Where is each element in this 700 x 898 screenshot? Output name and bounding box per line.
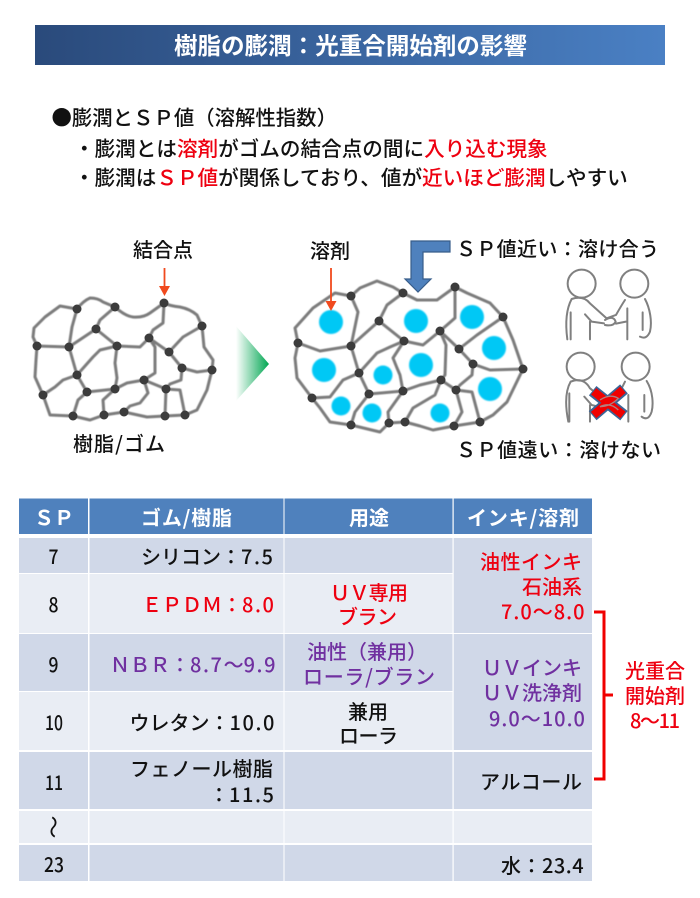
table header (19, 498, 592, 534)
label: close SP value: ＳＰ値近い：溶け合う (456, 233, 659, 262)
ink/solvent column values: 油性インキ (480, 546, 582, 575)
table (19, 498, 592, 881)
SP column values: 10 (45, 707, 63, 736)
rubber/resin column values: フェノール樹脂 (130, 753, 273, 782)
rubber/resin column values (110, 541, 277, 808)
label: solvent: 溶剤 (310, 235, 350, 264)
application column values: 兼用 (348, 696, 388, 725)
ink/solvent column values: 水：23.4 (501, 850, 584, 879)
text block: swelling and SP value: ●膨潤とＳＰ値（溶解性指数） (52, 101, 337, 131)
icon: two people failing to shake hands (566, 353, 653, 422)
ink/solvent column values: ＵＶインキ (482, 652, 582, 681)
callout: photoinitiator 8 to 11: 開始剤 (625, 680, 685, 709)
title: 樹脂の膨潤：光重合開始剤の影響 (174, 27, 527, 61)
solvent droplets (312, 305, 506, 422)
table header: ＳＰ (34, 502, 74, 531)
rubber/resin column values: ウレタン：10.0 (130, 707, 276, 736)
application column values (303, 577, 435, 749)
application column values: ＵＶ専用 (330, 577, 408, 606)
arrow: solvent (326, 268, 336, 311)
arrow: blue bent arrow (405, 241, 450, 292)
SP column values: 9 (48, 649, 58, 678)
SP column values: 7 (48, 541, 58, 570)
rubber/resin column values: ：11.5 (209, 779, 276, 808)
label: bonding point: 結合点 (133, 234, 193, 263)
rubber/resin column values: シリコン：7.5 (141, 541, 275, 570)
diagram: resin network before swelling (32, 298, 216, 420)
SP column values: 23 (44, 849, 64, 878)
SP column values: 8 (48, 589, 58, 618)
icon: two people shaking hands (566, 270, 651, 339)
bracket: photoinitiator range (594, 612, 613, 779)
ink/solvent column values: アルコール (480, 766, 582, 795)
ink/solvent column values: 7.0〜8.0 (501, 596, 586, 625)
arrow: green transition triangle (236, 326, 269, 401)
application column values: ローラ/ブラン (303, 661, 435, 690)
ink/solvent column values: ＵＶ洗浄剤 (482, 677, 582, 706)
table header: ゴム/樹脂 (141, 502, 232, 531)
ink/solvent column values: 9.0〜10.0 (489, 703, 586, 732)
ink/solvent column values: 石油系 (522, 571, 582, 600)
label: resin/rubber: 樹脂/ゴム (73, 428, 165, 457)
icon: red cross (593, 389, 624, 416)
SP column values: 11 (45, 767, 63, 796)
callout: photoinitiator 8 to 11 (625, 655, 685, 734)
table header: インキ/溶剤 (467, 502, 579, 531)
diagram: swollen resin network with solvent (294, 281, 528, 432)
text block: swelling and SP value (52, 101, 628, 191)
ink/solvent column values (480, 546, 586, 879)
title (35, 25, 665, 65)
application column values: ローラ (339, 720, 398, 749)
text block: swelling and SP value: ・膨潤とは溶剤がゴムの結合点の間に入り込む現象 (74, 132, 548, 162)
SP column values: 〜 (38, 816, 72, 838)
callout: photoinitiator 8 to 11: 8〜11 (630, 705, 680, 734)
arrow: bonding point (159, 268, 170, 296)
application column values: ブラン (338, 601, 397, 630)
text block: swelling and SP value: ・膨潤はＳＰ値が関係しており、値が近いほど膨潤しやすい (74, 161, 628, 191)
rubber/resin column values: ＮＢＲ：8.7〜9.9 (110, 649, 277, 678)
application column values: 油性（兼用） (307, 636, 427, 665)
SP column values (38, 541, 72, 878)
label: distant SP value: ＳＰ値遠い：溶けない (456, 434, 661, 463)
callout: photoinitiator 8 to 11: 光重合 (625, 655, 685, 684)
table rows background (19, 538, 592, 881)
rubber/resin column values: ＥＰＤＭ：8.0 (142, 589, 276, 618)
table header: 用途 (349, 502, 389, 531)
